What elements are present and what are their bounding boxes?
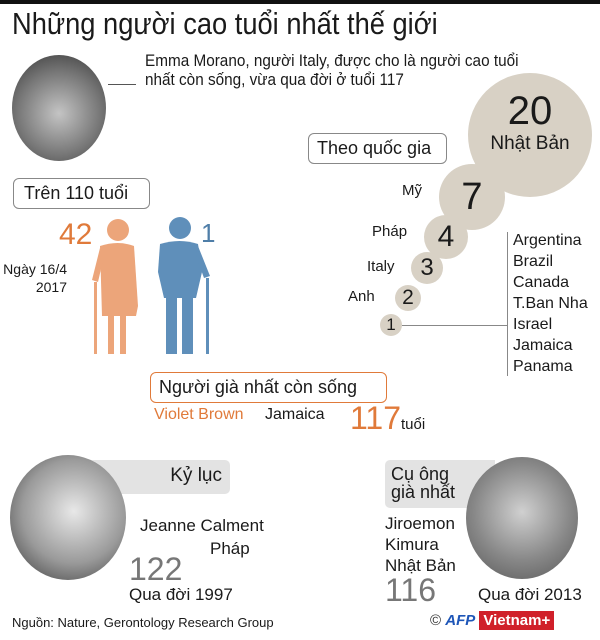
number: 117 tuổi: 117tuổi bbox=[350, 400, 425, 436]
chart: bubbles by country bbox=[348, 73, 592, 336]
label: Anh: Anh bbox=[348, 288, 375, 305]
heading: oldest living: Người già nhất còn sống bbox=[159, 377, 357, 397]
text: Jiroemon Kimura: Kimura bbox=[385, 535, 439, 554]
bubble: USA 7 bbox=[439, 164, 505, 230]
label band: Cụ ông già nhất: già nhất bbox=[391, 482, 455, 502]
text: died 2013: Qua đời 2013 bbox=[478, 585, 582, 604]
label: Mỹ: Mỹ bbox=[402, 182, 422, 199]
text: died 1997: Qua đời 1997 bbox=[129, 585, 233, 604]
list: countries with 1: Canada bbox=[513, 274, 569, 291]
list: countries with 1: T.Ban Nha bbox=[513, 295, 588, 312]
text: Emma caption: nhất còn sống, vừa qua đời ở tuổi 117 bbox=[145, 70, 404, 89]
panel: oldest man bbox=[385, 457, 582, 608]
bubble: Italy 3 bbox=[411, 252, 443, 284]
label band: Cụ ông già nhất bbox=[385, 460, 495, 508]
label: Pháp: Pháp bbox=[372, 223, 407, 240]
bubble: 1: 1 bbox=[386, 315, 396, 334]
list: countries with 1: Brazil bbox=[513, 253, 553, 270]
logo: AFP Vietnam+: © AFP Vietnam+ bbox=[430, 612, 550, 629]
text: Emma caption bbox=[145, 51, 518, 89]
bubble: 1 bbox=[380, 314, 402, 336]
bubble: France 4: 4 bbox=[438, 220, 454, 253]
heading: Trên 110 tuổi bbox=[13, 178, 150, 209]
bubble: France 4 bbox=[424, 215, 468, 259]
panel: record bbox=[10, 455, 264, 604]
bubble: Japan 20 bbox=[468, 73, 592, 197]
text: Jeanne Calment: Jeanne Calment bbox=[140, 516, 264, 535]
list: countries with 1: Argentina bbox=[513, 232, 582, 249]
bubble: Italy 3: 3 bbox=[420, 254, 434, 281]
label: Italy: Italy bbox=[367, 258, 395, 275]
number: 116: 116 bbox=[385, 572, 436, 608]
photo: Jiroemon Kimura bbox=[466, 457, 578, 579]
number: 1 man: 1 bbox=[201, 218, 215, 248]
icon: old man bbox=[158, 217, 210, 354]
text: Jiroemon Kimura: Nhật Bản bbox=[385, 556, 456, 575]
bubble: UK 2: 2 bbox=[402, 286, 414, 309]
icon: old woman bbox=[92, 219, 138, 354]
bubble: USA 7: 7 bbox=[461, 176, 483, 218]
text: source: Nguồn: Nature, Gerontology Research Group bbox=[12, 615, 274, 630]
number: 122: 122 bbox=[129, 551, 182, 587]
title: Những người cao tuổi nhất thế giới bbox=[12, 6, 438, 41]
text: date: Ngày 16/4 bbox=[3, 261, 67, 277]
bubble: Japan 20: 20 bbox=[508, 89, 552, 133]
list: countries with 1: Israel bbox=[513, 316, 552, 333]
label band: Kỷ lục bbox=[90, 460, 230, 494]
text: Jiroemon Kimura: Jiroemon bbox=[385, 514, 455, 533]
heading: Theo quốc gia bbox=[308, 133, 447, 164]
label band: Cụ ông già nhất: Cụ ông bbox=[391, 464, 449, 484]
heading: oldest living bbox=[150, 372, 387, 403]
bubble: Japan 20: Nhật Bản bbox=[490, 133, 570, 154]
text: Emma caption: Emma Morano, người Italy, được cho là người cao tuổi bbox=[145, 51, 518, 70]
heading: Theo quốc gia: Theo quốc gia bbox=[317, 138, 431, 158]
list: countries with 1: Jamaica bbox=[513, 337, 573, 354]
text: Jamaica: Jamaica bbox=[265, 406, 325, 423]
text: date: 2017 bbox=[36, 279, 67, 295]
label band: Kỷ lục: Kỷ lục bbox=[170, 465, 222, 486]
heading: Trên 110 tuổi: Trên 110 tuổi bbox=[24, 183, 128, 203]
text: Violet Brown: Violet Brown bbox=[154, 406, 244, 423]
number: 42 women: 42 bbox=[59, 218, 92, 251]
photo: Jeanne Calment bbox=[10, 455, 126, 580]
arrow: Emma pointer bbox=[108, 84, 136, 85]
photo: Emma Morano bbox=[12, 55, 106, 161]
bubble: UK 2 bbox=[395, 285, 421, 311]
text: Pháp: Pháp bbox=[210, 539, 250, 558]
text: Jiroemon Kimura bbox=[385, 514, 456, 575]
list: countries with 1: Panama bbox=[513, 358, 573, 375]
list: countries with 1 bbox=[513, 232, 588, 375]
text: date bbox=[3, 261, 67, 295]
